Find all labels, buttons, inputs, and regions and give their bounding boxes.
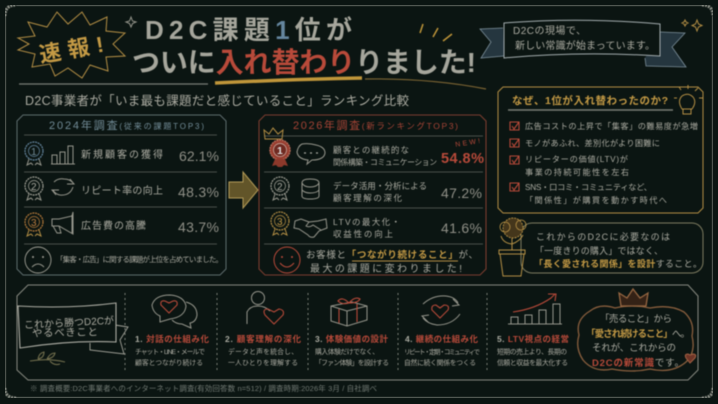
- panel conclusion: 最大の課題に変わりました!: [310, 262, 462, 275]
- rank 1 row: 54.8%: [441, 151, 484, 167]
- step 4: loop: 4. 継続の仕組み化: [405, 334, 478, 344]
- callout: new common sense: それが、これからの: [592, 342, 676, 354]
- rank 1 row: 関係構築・コミュニケーション: [333, 157, 437, 167]
- rank 1 row: 1: [277, 145, 283, 157]
- step 4: loop: 自然に続く関係をつくる: [404, 358, 476, 367]
- rank 3 row: LTVの最大化・: [333, 217, 400, 227]
- checklist: リピーターの価値(LTV)が: [525, 154, 628, 164]
- step 3: gift: 「ファン体験」を設計する: [315, 358, 389, 367]
- accent dashes: [420, 24, 452, 41]
- arrow: [229, 172, 258, 208]
- rank 3 row: 3: [31, 218, 37, 229]
- callout: new common sense: [578, 306, 693, 371]
- sparkles gold: [682, 20, 702, 31]
- panel conclusion: お客様と「つながり続けること」が、: [306, 249, 478, 261]
- checklist: モノがあふれ、差別化がより困難に: [525, 138, 660, 148]
- rank 2 row: 2: [277, 182, 283, 193]
- step 2: understanding: データと声を統合し、: [228, 347, 298, 356]
- step 3: gift: 購入体験だけでなく、: [315, 347, 379, 356]
- rank 3 row: 広告費の高騰: [81, 219, 146, 232]
- step 3: gift: 3. 体験価値の設計: [315, 334, 388, 344]
- step 2: understanding: 2. 顧客理解の深化: [225, 334, 301, 344]
- rank 2 row: リピート率の向上: [81, 184, 163, 197]
- rank 2 row: データ活用・分析による: [333, 181, 427, 191]
- step 5: growth chart: 5. LTV視点の経営: [497, 334, 569, 344]
- ribbon: new common sense: [480, 20, 686, 67]
- panel: why the top changed: なぜ、1位が入れ替わったのか?: [512, 94, 668, 107]
- checklist: 広告コストの上昇で「集客」の難易度が急増: [525, 121, 698, 131]
- callout: new common sense: 「売ること」から: [600, 313, 672, 325]
- icon: crown: [264, 128, 283, 139]
- footer note: ※ 調査概要:D2C事業者へのインターネット調査(有効回答数 n=512) / 調査時期:2026年 3月 / 自社調べ: [30, 383, 378, 393]
- rank 3 row: 3: [277, 217, 283, 228]
- panel conclusion: [306, 249, 478, 275]
- title line 1: D2C課題1位が: [145, 15, 352, 45]
- step 1: dialogue: チャット・LINE・メールで: [135, 348, 205, 356]
- rank 1 row: 62.1%: [179, 148, 219, 164]
- callout: new common sense: D2Cの新常識です。: [592, 357, 684, 369]
- step 4: loop: [404, 296, 480, 367]
- ribbon: new common sense: D2Cの現場で、: [513, 24, 586, 37]
- callout: long-loved relationships: これからのD2Cに必要なのは: [536, 231, 670, 242]
- rank 1 row: 顧客との継続的な: [333, 145, 409, 155]
- callout: new common sense: 「愛され続けること」へ。: [586, 328, 690, 340]
- ribbon heading: [18, 303, 128, 354]
- rank 1 row: 1: [31, 147, 37, 158]
- icon: heart: [685, 354, 696, 363]
- rank 3 row: 43.7%: [178, 219, 219, 235]
- icon: leaf sprig: [30, 352, 65, 365]
- checklist: 事業の持続可能性を左右: [525, 167, 629, 177]
- section heading: D2C事業者が「いま最も課題だと感じていること」ランキング比較: [25, 93, 409, 108]
- callout: long-loved relationships: 「長く愛される関係」を設計すること。: [534, 258, 702, 269]
- rank 2 row: 47.2%: [441, 185, 482, 201]
- step 5: growth chart: 短期の売上より、長期の: [497, 347, 567, 356]
- rank 1 row: [25, 142, 219, 165]
- ribbon heading: やるべきこと: [32, 326, 98, 340]
- panel: 2024 survey: 2024年調査(従来の課題TOP3): [49, 118, 204, 132]
- burst badge: 速報!: [18, 12, 125, 78]
- panel: 2026 survey: 2026年調査(新ランキングTOP3): [293, 118, 458, 132]
- panel: 2026 survey: [259, 115, 486, 275]
- step 5: growth chart: [497, 294, 569, 367]
- title underline: [19, 78, 486, 89]
- rank 3 row: 収益性の向上: [333, 229, 393, 239]
- checklist: [510, 121, 698, 205]
- checklist: SNS・口コミ・コミュニティなど、: [525, 183, 652, 192]
- rank 1 row: [270, 138, 484, 167]
- rank 2 row: [271, 177, 482, 203]
- step 1: dialogue: 顧客とつながり続ける: [135, 358, 203, 367]
- panel: why the top changed: [498, 85, 703, 213]
- step 1: dialogue: [135, 295, 209, 367]
- callout: long-loved relationships: [521, 223, 703, 273]
- step 3: gift: [315, 298, 389, 367]
- burst badge: 速報!: 速報!: [37, 32, 106, 68]
- rank 1 row: 新規顧客の獲得: [81, 148, 163, 161]
- rank 2 row: 2: [31, 182, 37, 193]
- rank 3 row: [271, 212, 482, 239]
- callout: long-loved relationships: 「一度きりの購入」ではなく、: [535, 245, 663, 256]
- panel: 2024 survey: [17, 115, 226, 275]
- icon: callout crown: [619, 289, 648, 306]
- sparkle: [126, 17, 136, 27]
- rank 3 row: 41.6%: [441, 220, 482, 236]
- ribbon: new common sense: 新しい常識が始まっています。: [515, 39, 655, 52]
- panel: what to do: [17, 285, 698, 380]
- step 4: loop: リピート・定期・コミュニティで: [404, 348, 480, 356]
- rank 3 row: [25, 212, 219, 236]
- checklist: 「関係性」が購買を動かす時代へ: [525, 195, 667, 205]
- icon: potted flower: [499, 218, 526, 276]
- panel note: 「集客・広告」に関する課題が上位を占めていました。: [56, 254, 223, 264]
- rank 2 row: 顧客理解の深化: [333, 193, 402, 203]
- title line 2: ついに入れ替わりりました!: [132, 47, 476, 78]
- ribbon heading: これから勝つD2Cが: [24, 314, 114, 331]
- rank 1 row: NEW!: [455, 138, 481, 149]
- step 1: dialogue: 1. 対話の仕組み化: [135, 334, 209, 344]
- smile face: [274, 247, 300, 273]
- frown face: [25, 247, 51, 273]
- icon: light bulb: [674, 85, 703, 114]
- step 2: understanding: [225, 292, 301, 367]
- rank 2 row: [25, 177, 219, 200]
- rank 2 row: 48.3%: [178, 184, 219, 200]
- step 2: understanding: 一人ひとりを理解する: [228, 358, 298, 367]
- step 5: growth chart: 信頼と収益を最大化する: [497, 358, 568, 367]
